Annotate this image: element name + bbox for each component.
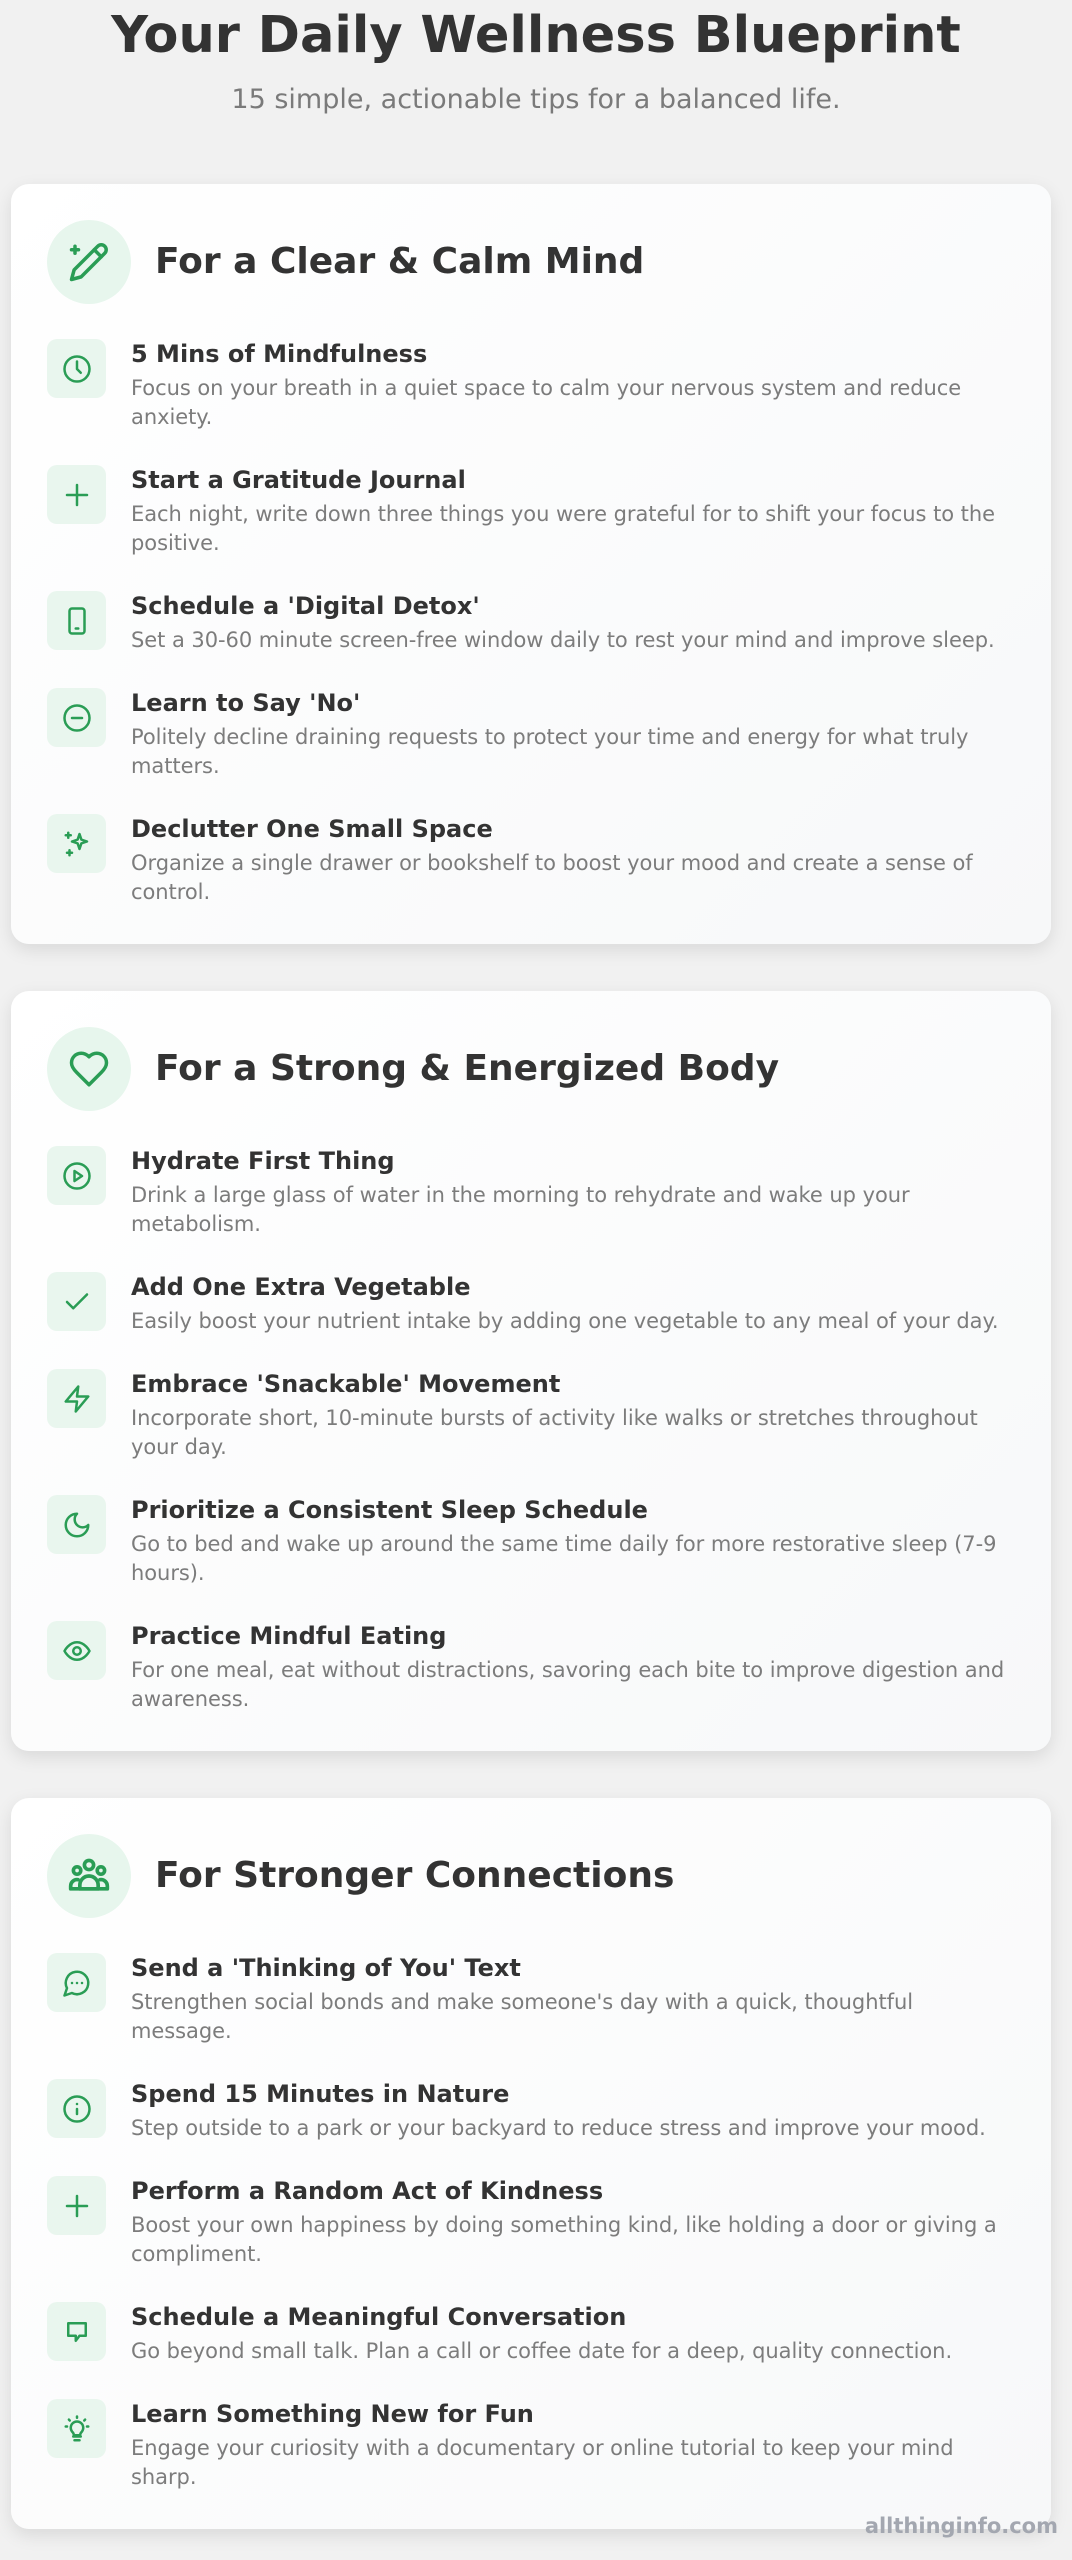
item: sleep [47,1495,996,1585]
item: nature: Step outside to a park or your backyard to reduce stress and improve your mood. [131,2116,986,2140]
item: sleep: Prioritize a Consistent Sleep Schedule [131,1496,648,1524]
item: digital detox: Schedule a 'Digital Detox' [131,592,480,620]
item: mindful eating: Practice Mindful Eating [131,1622,446,1650]
item: learn: Engage your curiosity with a documentary or online tutorial to keep your mind sharp. [131,2436,954,2489]
item: digital detox: Set a 30-60 minute screen-free window daily to rest your mind and improve sleep. [131,628,995,652]
item: kindness: Boost your own happiness by doing something kind, like holding a door or giving a compliment. [131,2213,997,2266]
item: declutter: Organize a single drawer or bookshelf to boost your mood and create a sense of control. [131,851,973,904]
item: vegetable: Add One Extra Vegetable [131,1273,470,1301]
item: gratitude: Each night, write down three things you were grateful for to shift your focus to the positive. [131,502,995,555]
item: vegetable [47,1272,998,1333]
item: gratitude: Start a Gratitude Journal [131,466,466,494]
item: kindness: Perform a Random Act of Kindness [131,2177,603,2205]
item: conversation: Go beyond small talk. Plan a call or coffee date for a deep, quality connection. [131,2339,952,2363]
title: Your Daily Wellness Blueprint [111,6,961,65]
heading: mind: For a Clear & Calm Mind [155,241,644,282]
panel: body [11,991,1051,1751]
item: digital detox [47,591,995,652]
item: mindfulness [47,339,961,429]
item: gratitude [47,465,995,555]
item: say no: Learn to Say 'No' [131,689,360,717]
item: mindfulness: Focus on your breath in a quiet space to calm your nervous system and reduce anxiety. [131,376,961,429]
heading: mind [47,220,644,304]
watermark: allthinginfo.com [865,2514,1058,2538]
item: hydrate [47,1146,910,1236]
icon: pencil [47,220,131,304]
item: nature [47,2079,986,2140]
item: mindfulness: 5 Mins of Mindfulness [131,340,427,368]
item: conversation [47,2302,952,2363]
item: declutter: Declutter One Small Space [131,815,493,843]
panel: connections [11,1798,1051,2529]
item: hydrate: Drink a large glass of water in the morning to rehydrate and wake up your metabolism. [131,1183,910,1236]
item: sleep: Go to bed and wake up around the same time daily for more restorative sleep (7-9 hours). [131,1532,996,1585]
item: kindness [47,2176,997,2266]
item: mindful eating [47,1621,1004,1711]
item: learn [47,2399,954,2489]
item: learn: Learn Something New for Fun [131,2400,534,2428]
icon: heart [47,1026,131,1110]
icon: people [47,1834,131,1918]
heading: body [47,1027,779,1111]
item: mindful eating: For one meal, eat without distractions, savoring each bite to improve digestion and awareness. [131,1658,1004,1711]
item: say no [47,688,968,778]
item: movement: Incorporate short, 10-minute bursts of activity like walks or stretches throughout your day. [131,1406,978,1459]
heading: body: For a Strong & Energized Body [155,1048,779,1089]
panel: mind [11,184,1051,944]
item: text: Send a 'Thinking of You' Text [131,1954,521,1982]
item: text: Strengthen social bonds and make someone's day with a quick, thoughtful message. [131,1990,913,2043]
item: say no: Politely decline draining requests to protect your time and energy for what truly matters. [131,725,968,778]
item: hydrate: Hydrate First Thing [131,1147,395,1175]
item: conversation: Schedule a Meaningful Conversation [131,2303,626,2331]
item: movement [47,1369,978,1459]
item: vegetable: Easily boost your nutrient intake by adding one vegetable to any meal of your day. [131,1309,998,1333]
heading: connections [47,1834,674,1918]
subtitle: 15 simple, actionable tips for a balanced life. [231,84,841,115]
heading: connections: For Stronger Connections [155,1855,674,1896]
item: movement: Embrace 'Snackable' Movement [131,1370,560,1398]
item: nature: Spend 15 Minutes in Nature [131,2080,509,2108]
item: text [47,1953,913,2043]
item: declutter [47,814,974,904]
